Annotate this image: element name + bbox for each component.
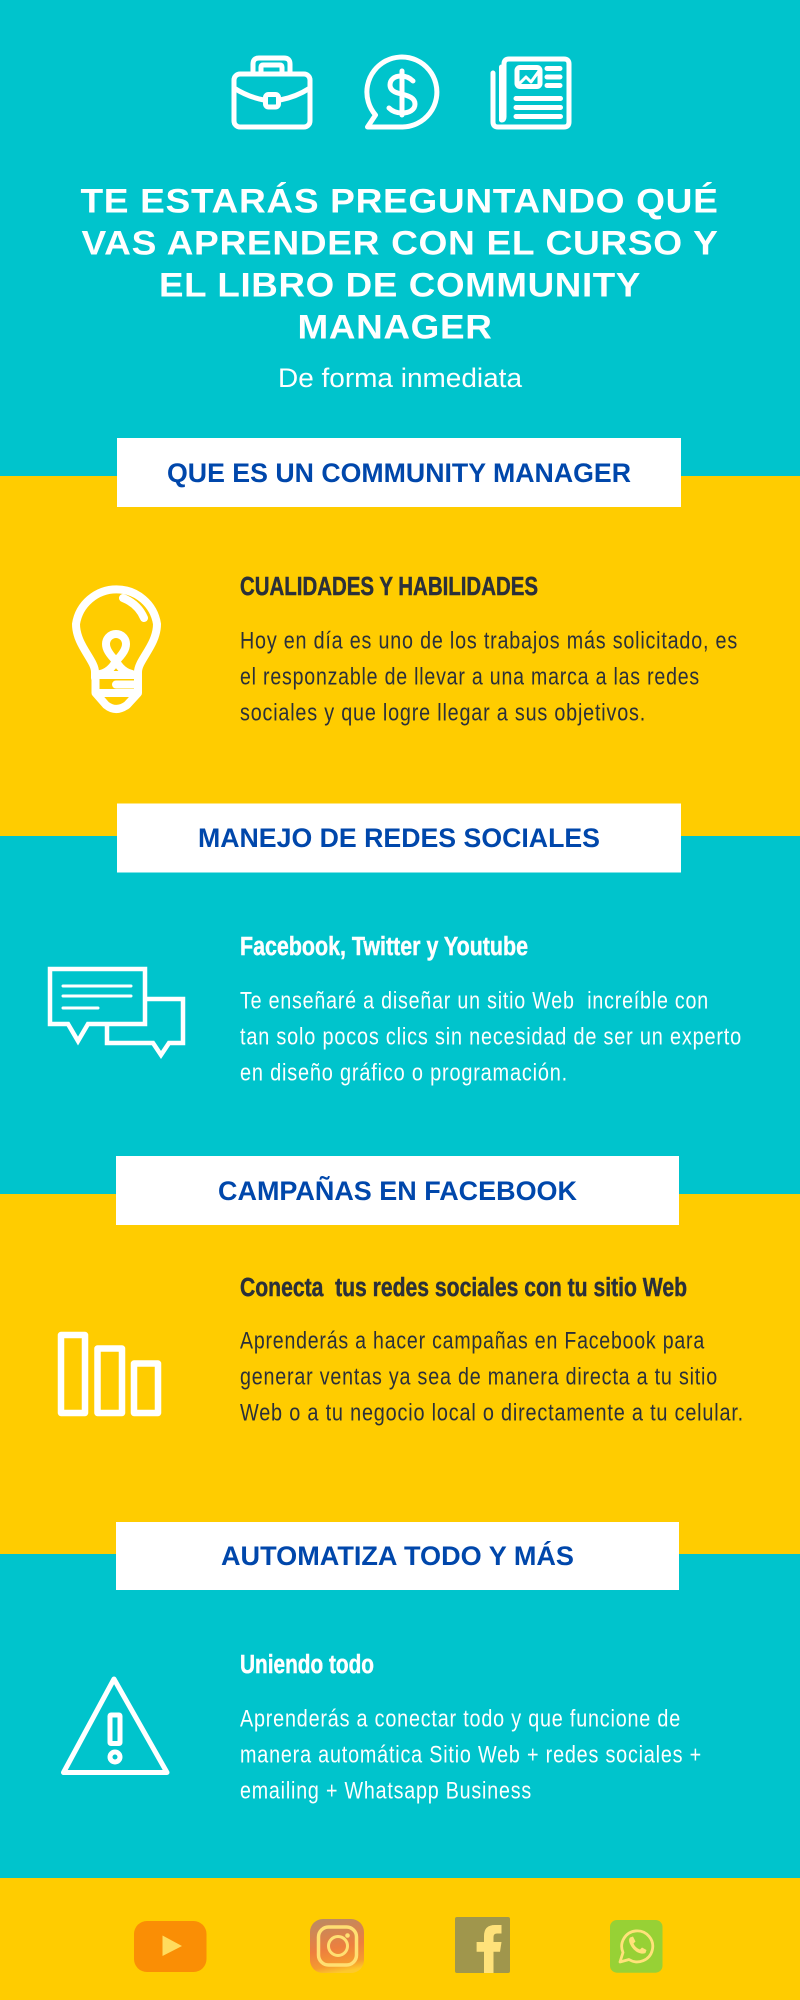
section banner — [116, 1522, 679, 1590]
panel: header — [0, 0, 800, 476]
text block: Aprenderás a conectar todo y que funcione de — [240, 1706, 681, 1732]
icon: chat bubbles — [50, 969, 183, 1055]
text block — [240, 1651, 702, 1804]
title: TE ESTARÁS PREGUNTANDO QUÉ — [80, 180, 718, 220]
text block — [240, 1274, 744, 1426]
text block — [240, 933, 742, 1086]
title: VAS APRENDER CON EL CURSO Y — [82, 224, 718, 262]
panel: que es un community manager — [0, 438, 800, 836]
icon: facebook — [455, 1917, 510, 1973]
text block: el responzable de llevar a una marca a las redes — [240, 664, 700, 690]
section banner: AUTOMATIZA TODO Y MÁS — [221, 1541, 574, 1571]
section banner: MANEJO DE REDES SOCIALES — [198, 823, 600, 853]
icon: briefcase — [234, 58, 310, 127]
panel: manejo de redes sociales — [0, 804, 800, 1194]
panel: footer social icons — [0, 1878, 800, 2000]
text block: sociales y que logre llegar a sus objetivos. — [240, 700, 646, 726]
icon: newspaper — [493, 59, 569, 127]
icon: youtube — [134, 1921, 206, 1972]
text block: en diseño gráfico o programación. — [240, 1060, 568, 1086]
text block: Conecta tus redes sociales con tu sitio Web — [240, 1274, 687, 1302]
icon: instagram — [310, 1919, 364, 1973]
section banner — [116, 1156, 679, 1225]
subtitle: De forma inmediata — [278, 363, 523, 393]
section banner: QUE ES UN COMMUNITY MANAGER — [167, 458, 631, 488]
panel: automatiza todo y más — [0, 1522, 800, 1878]
text block: CUALIDADES Y HABILIDADES — [240, 573, 538, 601]
icon: whatsapp — [610, 1920, 662, 1973]
title — [80, 180, 718, 346]
text block: Uniendo todo — [240, 1651, 374, 1679]
text block: emailing + Whatsapp Business — [240, 1778, 532, 1804]
icon: light bulb — [76, 589, 157, 709]
text block — [240, 573, 738, 726]
icon: warning triangle — [64, 1679, 167, 1772]
icon: dollar speech bubble — [367, 57, 437, 127]
panel: campañas en facebook — [0, 1156, 800, 1554]
icon: bar chart — [61, 1335, 158, 1413]
section banner — [117, 804, 681, 872]
text block: Facebook, Twitter y Youtube — [240, 933, 528, 961]
title: MANAGER — [298, 308, 492, 346]
title: EL LIBRO DE COMMUNITY — [159, 266, 641, 304]
section banner: CAMPAÑAS EN FACEBOOK — [218, 1176, 577, 1206]
section banner — [117, 438, 681, 507]
text block: manera automática Sitio Web + redes sociales + — [240, 1742, 702, 1768]
